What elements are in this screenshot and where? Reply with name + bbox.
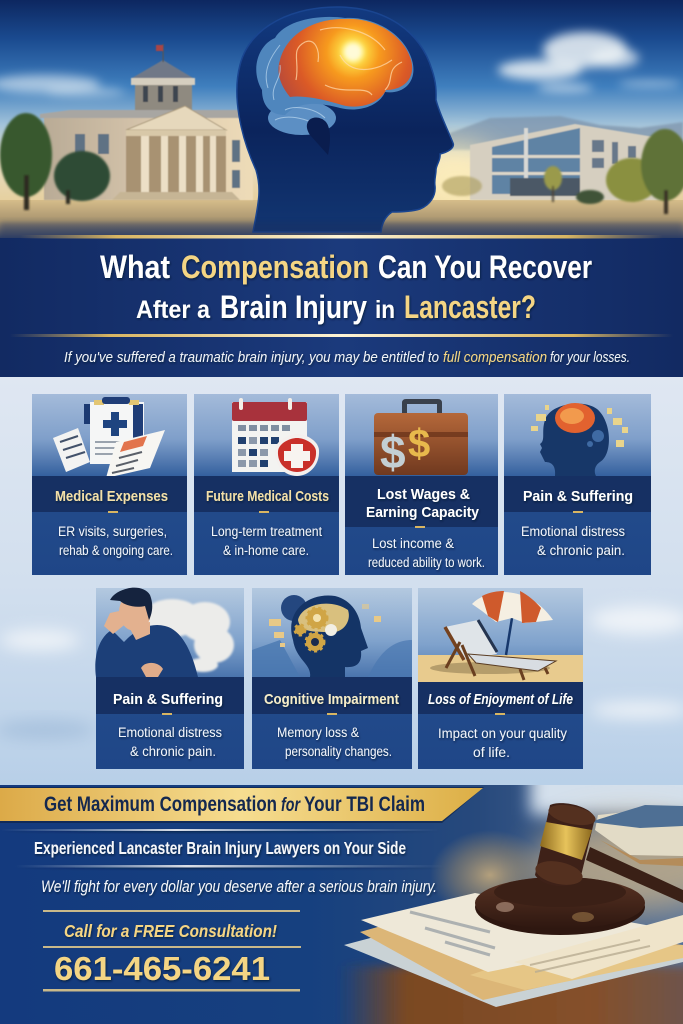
card: lost wages [345,394,498,575]
card: pain and suffering 2: & chronic pain. [130,744,216,759]
card: future medical costs [194,394,339,575]
papers [344,893,683,1007]
title: After a [136,296,211,324]
card: pain and suffering 1: Emotional distress [521,524,625,539]
card: medical expenses: ER visits, surgeries, [58,524,167,539]
card: cognitive impairment [252,588,412,769]
bottom call to action panel [0,765,683,1024]
card: lost wages: Earning Capacity [366,504,480,521]
banner: Your TBI Claim [304,793,425,816]
icon: head with gears [252,595,412,677]
subtitle: for your losses. [550,349,630,366]
icon: briefcase with dollar signs: $ [408,422,430,466]
card: cognitive impairment: Memory loss & [277,725,359,740]
card: loss of enjoyment: Impact on your quality [438,726,567,741]
title [100,249,592,325]
banner [0,787,484,823]
card: pain and suffering 1: Pain & Suffering [523,488,633,505]
office building [470,124,660,200]
banner: for [281,795,301,816]
phone block: Call for a FREE Consultation! [64,921,277,941]
card: future medical costs: & in-home care. [223,543,309,558]
icon: briefcase with dollar signs [374,399,468,478]
band [32,476,187,512]
card: future medical costs: Future Medical Costs [206,488,329,505]
card: pain and suffering 2: Emotional distress [118,725,222,740]
card: pain and suffering 1: & chronic pain. [537,543,625,558]
courthouse [40,44,253,200]
title: in [375,296,395,324]
card: pain and suffering 1 [504,394,651,575]
hero scene [0,0,683,240]
gavel [475,801,683,935]
card: medical expenses: Medical Expenses [55,488,168,505]
card: lost wages: reduced ability to work. [368,555,485,570]
icon: head with glowing brain [531,403,628,476]
card: loss of enjoyment: Loss of Enjoyment of Life [428,691,573,708]
icon: man with headache and cloud [95,588,234,677]
card: future medical costs: Long-term treatment [211,524,322,539]
card: cognitive impairment: Cognitive Impairment [264,691,399,708]
title: Brain Injury [220,289,367,325]
title: Lancaster? [404,289,536,325]
books [590,805,683,866]
trees [0,113,683,214]
body background [0,377,683,792]
card: lost wages: Lost Wages & [377,486,470,503]
title: Can You Recover [378,249,592,285]
supporting text: Experienced Lancaster Brain Injury Lawyers on Your Side [34,838,406,858]
card: pain and suffering 2 [95,588,244,769]
card: cognitive impairment: personality changes. [285,744,392,759]
icon: briefcase with dollar signs: $ [380,426,406,478]
distant mountains [445,116,683,150]
sun glow behind head [410,145,500,215]
corner shadow [0,222,683,238]
icon: calendar with red cross badge [232,398,319,476]
icon: beach chair and umbrella [418,591,583,682]
supporting text [0,829,445,896]
title band [0,235,683,377]
clouds [0,32,682,97]
title: Compensation [181,249,369,285]
phone block [43,910,301,992]
title: What [100,249,170,285]
head silhouette [237,7,453,232]
supporting text: We'll fight for every dollar you deserve after a serious brain injury. [41,877,437,896]
card: loss of enjoyment [418,588,583,769]
card: loss of enjoyment: of life. [473,745,510,760]
phone block: 661-465-6241 [54,950,270,987]
ground [0,200,683,238]
subtitle: If you've suffered a traumatic brain injury, you may be entitled to [64,349,439,366]
banner: Get Maximum Compensation [44,793,277,816]
subtitle: full compensation [443,349,547,366]
card: lost wages: Lost income & [372,536,454,551]
card: medical expenses [32,394,187,575]
icon: clipboard and papers [53,397,165,478]
brain [256,17,413,135]
card: pain and suffering 2: Pain & Suffering [113,691,223,708]
card: medical expenses: rehab & ongoing care. [59,543,173,558]
